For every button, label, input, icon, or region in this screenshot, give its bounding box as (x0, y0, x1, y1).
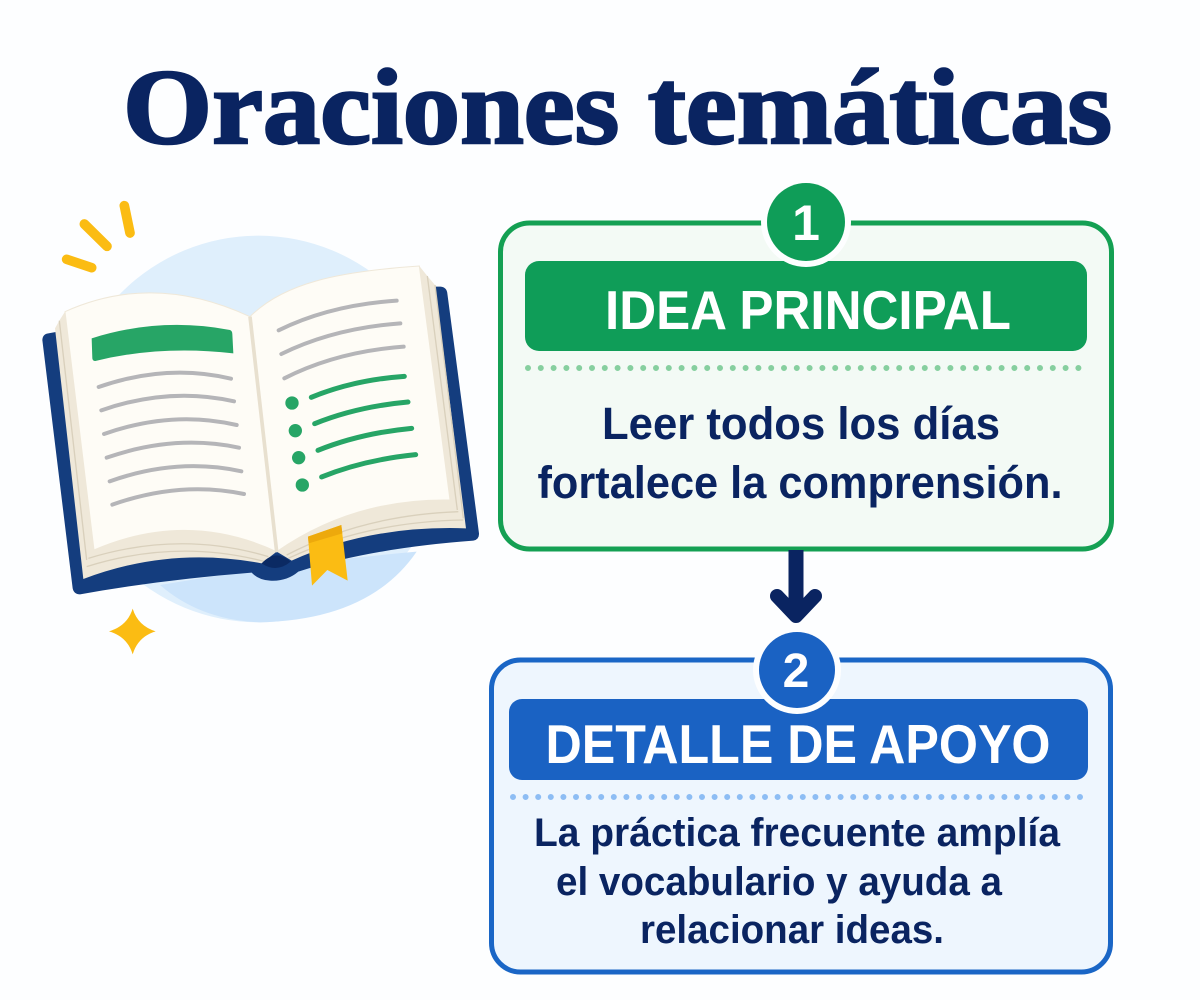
arrow (777, 550, 815, 616)
panel body text: el vocabulario y ayuda a (556, 860, 1003, 904)
sparkle rays (67, 206, 130, 268)
green bullets (285, 396, 309, 492)
background circle (65, 236, 452, 622)
number badge (753, 626, 841, 714)
right page (250, 266, 450, 552)
number badge: 1 (792, 195, 820, 251)
panel 2: detalle de apoyo (492, 626, 1110, 972)
panel body text: Leer todos los días (602, 398, 1000, 449)
page stack left (55, 312, 277, 579)
panel body text (534, 811, 1061, 952)
panel box (500, 223, 1112, 549)
panel body text (538, 398, 1062, 508)
right page green lines (311, 376, 416, 477)
panel body text: fortalece la comprensión. (538, 457, 1062, 508)
page stack right (250, 266, 466, 561)
title: Oraciones temáticas (123, 49, 1112, 167)
spine fold (250, 317, 277, 552)
illustration: open book (42, 206, 479, 654)
header text: DETALLE DE APOYO (546, 713, 1050, 775)
dotted divider (528, 365, 1084, 371)
spine hollow (262, 555, 291, 568)
header text: IDEA PRINCIPAL (605, 279, 1011, 341)
dotted divider (513, 794, 1084, 800)
book shadow (160, 552, 417, 622)
panel box (492, 660, 1110, 972)
number badge (761, 177, 851, 267)
book cover (42, 287, 479, 594)
icon: star (109, 609, 156, 654)
number badge: 2 (783, 645, 809, 698)
panel body text: La práctica frecuente amplía (534, 811, 1061, 855)
panel 1: idea principal (500, 177, 1112, 549)
panel body text: relacionar ideas. (640, 908, 944, 952)
header bar (525, 261, 1087, 351)
page edges (59, 276, 463, 567)
header bar (509, 699, 1088, 780)
left page heading bar (92, 325, 233, 361)
left page (65, 293, 277, 552)
right page grey lines (279, 301, 404, 378)
left page text lines (99, 373, 244, 505)
bookmark (308, 525, 348, 586)
